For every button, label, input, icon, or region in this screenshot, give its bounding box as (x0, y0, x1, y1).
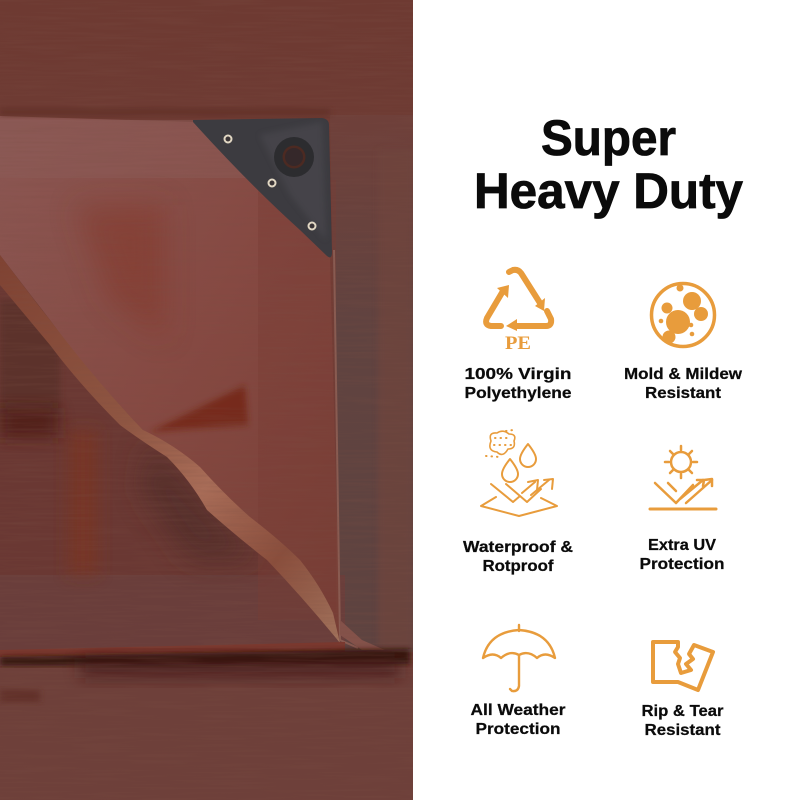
feature: waterproof (463, 430, 573, 575)
feature: waterproof: Rotproof (482, 558, 554, 575)
feature: mold (624, 284, 743, 402)
label: Extra UV (648, 537, 716, 554)
title (474, 110, 743, 219)
label: All Weather (470, 702, 566, 719)
feature: virgin polyethylene: Polyethylene (464, 385, 572, 402)
label: Rip & Tear (642, 703, 724, 720)
grommet (274, 137, 314, 177)
folded panel (0, 116, 340, 640)
rivets (224, 136, 316, 230)
corner reinforcement patch (193, 118, 332, 257)
icon: torn material (653, 642, 713, 690)
icon: recycle PE: PE (505, 333, 531, 354)
icon: sun and reflection (650, 446, 716, 509)
label: Mold & Mildew (624, 366, 743, 383)
feature: rip and tear (642, 642, 724, 739)
icon: petri dish (652, 284, 714, 346)
icon: spores, drops, reflection (481, 430, 557, 516)
lower left tarp section (0, 270, 345, 656)
fold flap highlight (0, 255, 340, 643)
feature: rip and tear: Resistant (644, 722, 721, 739)
fold shadow (0, 108, 330, 116)
tarp photo (0, 0, 413, 800)
feature: UV: Protection (640, 556, 724, 573)
bottom tarp section (0, 668, 80, 670)
label: Waterproof & (463, 539, 573, 556)
feature: all weather (470, 625, 566, 738)
icon: umbrella (483, 625, 555, 691)
right tarp strip (336, 180, 413, 652)
title: Super (541, 110, 676, 166)
label: 100% Virgin (464, 366, 572, 383)
hem and shadow (0, 642, 345, 657)
feature: virgin polyethylene (464, 270, 572, 402)
feature: mold: Resistant (645, 385, 722, 402)
title: Heavy Duty (474, 163, 743, 219)
feature: all weather: Protection (476, 721, 560, 738)
feature: UV (640, 446, 724, 573)
right edge seam (334, 250, 358, 648)
